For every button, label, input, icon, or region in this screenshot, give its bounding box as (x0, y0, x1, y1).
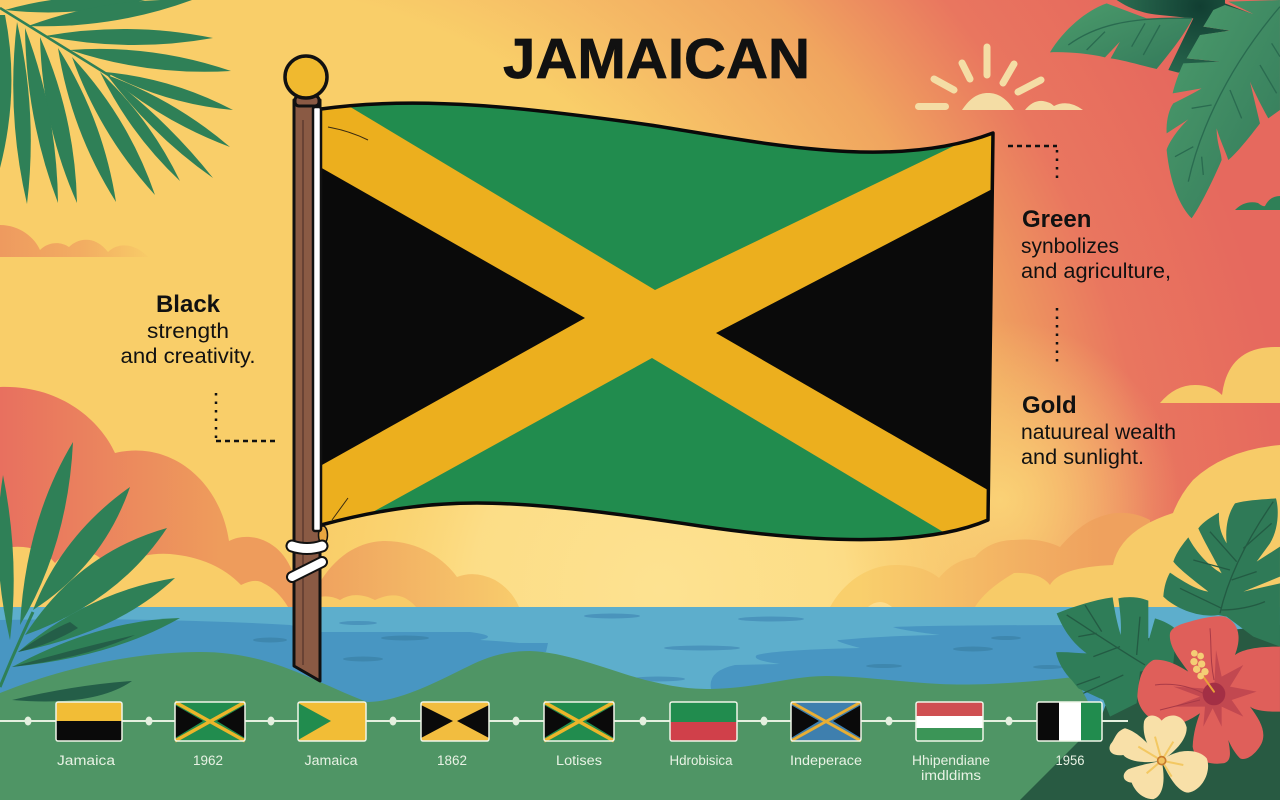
callout: green: and agriculture, (1021, 260, 1171, 283)
sun icon (915, 47, 1083, 110)
mini flag 7 (791, 702, 861, 741)
large banana leaf (1167, 0, 1280, 218)
Jamaican flag (310, 90, 1010, 560)
cream flower (1109, 715, 1208, 799)
timeline labels (57, 753, 1084, 783)
callout: black: strength (147, 320, 229, 343)
callout: green: synbolizes (1021, 235, 1119, 258)
timeline line (0, 720, 1128, 722)
timeline labels: Jamaica (304, 753, 358, 768)
timeline labels: Hhipendiane (912, 753, 990, 768)
timeline labels: 1962 (193, 753, 223, 768)
leader line: green (1008, 145, 1057, 147)
distant clouds left (0, 225, 148, 257)
hoist strip and rope (292, 107, 328, 577)
upper banana leaf (1050, 3, 1193, 69)
timeline labels: 1956 (1056, 753, 1084, 768)
leader line: green vertical (1056, 150, 1058, 184)
pole (294, 100, 320, 681)
sea (0, 607, 1280, 717)
timeline labels: Jamaica (57, 753, 116, 768)
gold finial (285, 56, 327, 98)
leader line: black horizontal (216, 440, 276, 442)
distant green hill right (1235, 196, 1280, 210)
hibiscus flower (1137, 616, 1280, 764)
timeline dots (24, 716, 1012, 726)
timeline (0, 702, 1128, 783)
callout: black (120, 291, 256, 368)
timeline labels: Hdrobisica (670, 753, 733, 768)
dark shadow leaf (1117, 0, 1255, 73)
mini flag 5 (544, 702, 614, 741)
timeline labels: imdldims (921, 768, 981, 783)
palm frond bottom left (0, 442, 180, 701)
clouds right (830, 347, 1280, 620)
mini flag 1 (56, 702, 122, 741)
timeline labels: 1862 (437, 753, 467, 768)
callout: black: and creativity. (120, 345, 256, 368)
callout: gold (1021, 392, 1176, 469)
palm frond top left (0, 0, 233, 204)
mini flag 2 (175, 702, 245, 741)
timeline labels: Indeperace (790, 753, 862, 768)
callout: gold: and sunlight. (1021, 446, 1144, 469)
banana leaves top right (1050, 0, 1280, 218)
green hills foreground (0, 625, 1280, 800)
mini flag 8 (916, 702, 983, 741)
mini flag 6 (670, 702, 737, 741)
mini flag 3 (298, 702, 366, 741)
title: JAMAICAN (503, 27, 810, 91)
leader line: black (215, 393, 217, 440)
callout: gold: Gold (1022, 392, 1077, 419)
timeline labels: Lotises (556, 753, 602, 768)
callout: black: Black (156, 291, 221, 318)
callout: green: Green (1022, 206, 1091, 233)
monstera leaf upper right (1163, 498, 1280, 647)
leader line: gold (1056, 308, 1058, 366)
clouds behind flag (320, 541, 519, 607)
mini flag 4 (421, 702, 489, 741)
callout: gold: natuureal wealth (1021, 421, 1176, 444)
clouds bottom left (0, 387, 295, 607)
flagpole (285, 56, 327, 681)
callout: green (1021, 206, 1171, 283)
monstera leaf lower (1056, 597, 1177, 717)
mini flag 9 (1037, 702, 1102, 741)
